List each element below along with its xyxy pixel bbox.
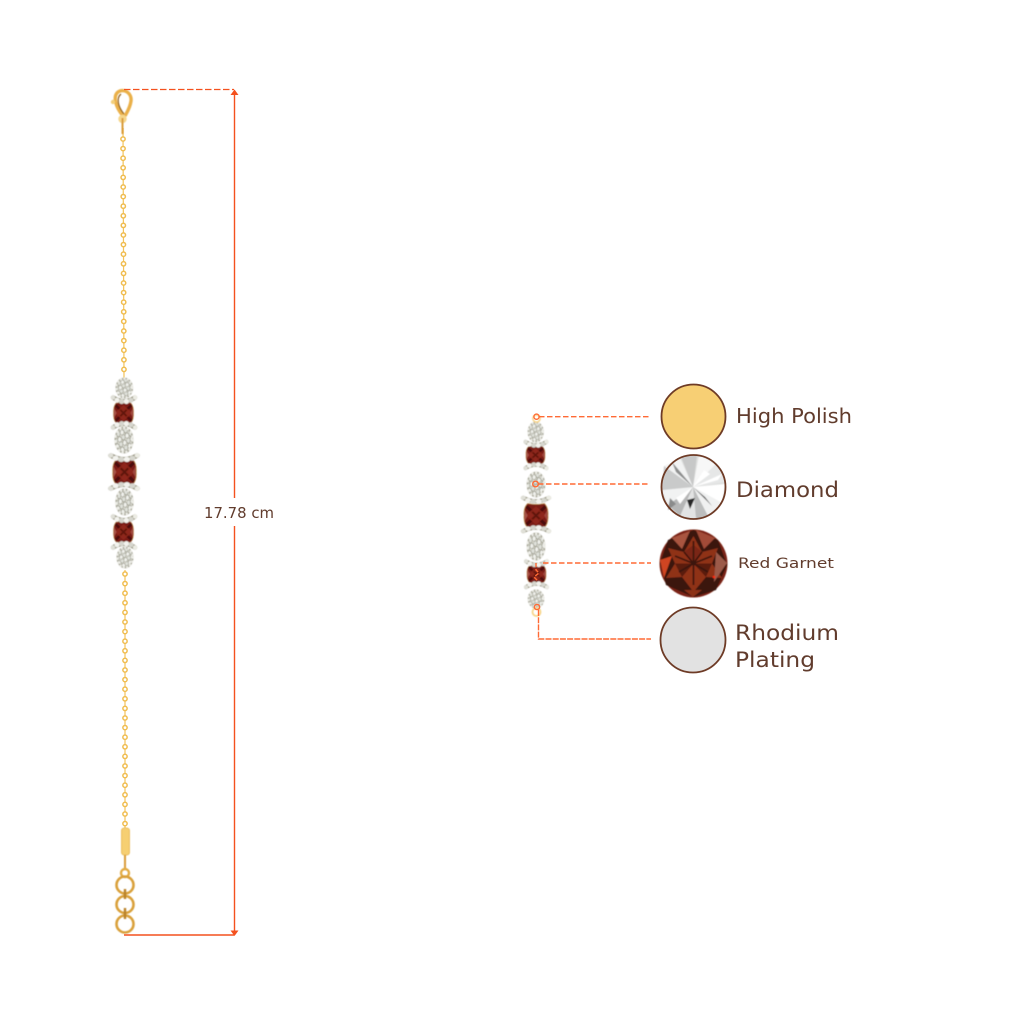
gemstone section: [108, 378, 140, 568]
swatch: high polish: [662, 384, 726, 448]
callout: diamond: [533, 481, 650, 487]
chain: upper: [123, 128, 124, 378]
label: diamond: Diamond: [736, 478, 839, 502]
chain: lower: [124, 570, 126, 828]
label: rhodium plating: Rhodium: [735, 621, 839, 645]
label: rhodium plating: [735, 621, 839, 672]
label: red garnet: Red Garnet: [738, 556, 834, 572]
full bracelet: [108, 91, 140, 933]
callout: high polish: [534, 414, 650, 419]
lobster clasp: [111, 91, 131, 134]
callout lines: [533, 414, 651, 639]
label: rhodium plating: Plating: [735, 648, 815, 672]
swatch: red garnet: [660, 530, 728, 598]
bracelet detail: [521, 415, 551, 616]
dimension line: 17.78 cm: [124, 90, 238, 936]
callout: red garnet: [534, 563, 651, 581]
dimension label: 17.78 cm: [204, 504, 274, 522]
swatch: rhodium plating: [660, 608, 726, 672]
label: high polish: High Polish: [736, 404, 852, 428]
clasp tag and rings: [116, 828, 134, 932]
swatch: diamond: [662, 455, 726, 519]
callout: rhodium plating: [534, 604, 651, 639]
